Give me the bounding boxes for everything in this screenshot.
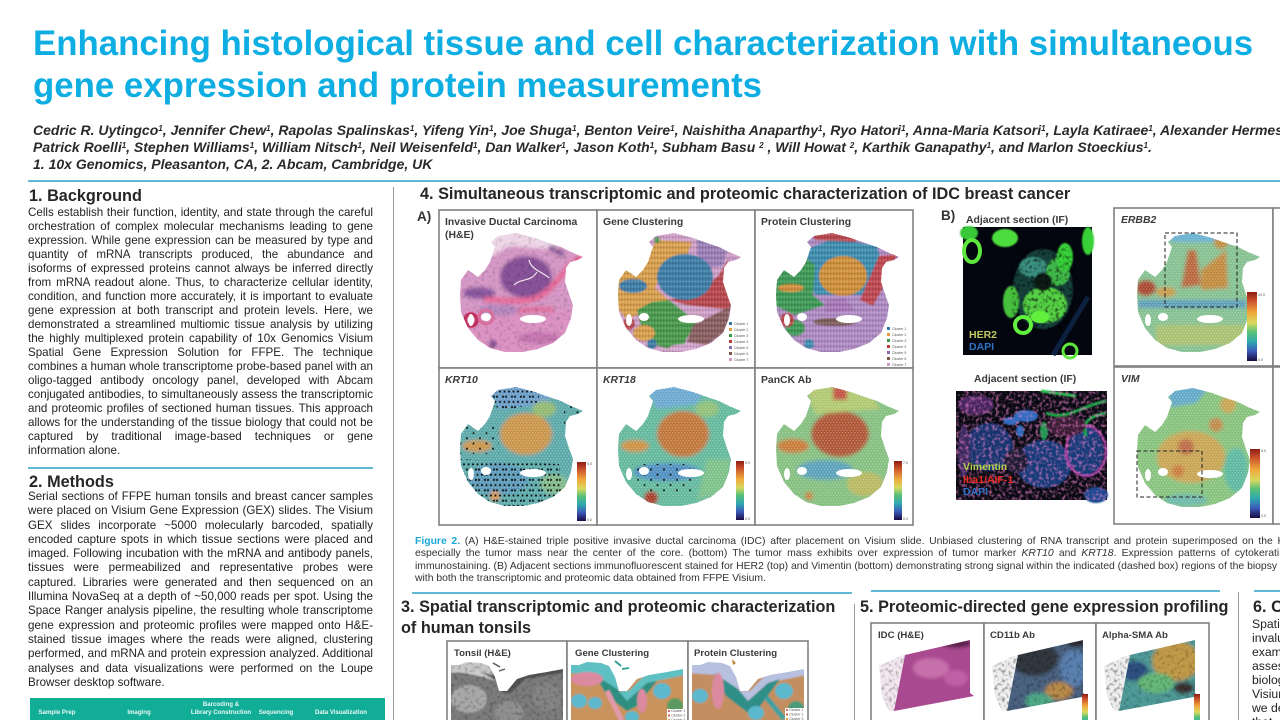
text: background: combines a human whole transcriptome probe-based panel with an (28, 360, 373, 373)
labels: HER2 channels (969, 329, 997, 353)
label: adjacent section vimentin: Adjacent section (IF) (974, 374, 1076, 385)
panel: KRT10: 0.0 (587, 518, 592, 522)
text: background: allows for the understanding of the tissue biology that could not be (28, 416, 373, 429)
panel: gene clustering (597, 210, 755, 368)
panel: VIM: 9.0 (1261, 449, 1266, 453)
text: methods: gene expression and proteomic profiles were mapped onto H&E- (28, 619, 373, 632)
legend: tonsil gene clusters (667, 709, 685, 720)
panel: KRT18: 0.0 (745, 517, 750, 521)
panel: tonsil protein clustering: Protein Clustering (694, 648, 777, 659)
legend: protein clusters: Cluster 5 (892, 351, 906, 355)
panel: VIM: 0.0 (1261, 514, 1266, 518)
text: background: quantity of mRNA transcripts produced, the abundance and (28, 248, 373, 261)
legend: gene clusters (729, 322, 748, 362)
legend: gene clusters: Cluster 7 (734, 358, 748, 362)
legend: gene clusters: Cluster 5 (734, 346, 748, 350)
text: methods: were placed on Visium Gene Expression (GEX) slides. The Visium (28, 504, 373, 517)
panel: ERBB2 (1114, 208, 1274, 368)
text: background: oligo-tagged antibody oncology panel, developed with Abcam (28, 374, 373, 387)
heading: section 5: 5. Proteomic-directed gene expression profiling (860, 598, 1228, 616)
figure caption: especially the tumor mass near the center of the core. (bottom) The tumor mass exhibits over expression of tumor marker KRT10 and KRT18. Expression patterns of cytokeratin (415, 548, 1280, 559)
labels: vimentin channels: Iba1/AIF-1 (963, 474, 1013, 486)
heading: section 3: of human tonsils (401, 619, 531, 637)
labels: vimentin channels: Vimentin (963, 461, 1007, 473)
text: methods (28, 490, 373, 689)
authors and affiliations: 1. 10x Genomics, Pleasanton, CA, 2. Abcam, Cambridge, UK (33, 156, 432, 172)
figure caption (415, 536, 1280, 584)
workflow header band (30, 698, 385, 720)
text: methods: stained tissue images where the reads were aligned, clustering (28, 633, 373, 646)
panel: tonsil H&E (447, 641, 567, 720)
text: methods: analyses and data visualizations were performed on the Loupe (28, 662, 373, 675)
figure caption: with both the transcriptomic and proteomic data obtained from FFPE Visium. (415, 573, 766, 584)
panel: tonsil protein clustering (688, 641, 808, 720)
text: methods: Illumina NovaSeq at a depth of ~50,000 reads per spot. Using the (28, 590, 373, 603)
legend: protein clusters: Cluster 4 (892, 345, 906, 349)
image: vimentin immunofluorescence (956, 391, 1108, 503)
panel: tonsil H&E: Tonsil (H&E) (454, 648, 511, 659)
workflow header band: Imaging (127, 709, 151, 716)
legend: gene clusters: Cluster 1 (734, 322, 748, 326)
text: background: demonstrated a streamlined multiomic tissue analysis by utilizing (28, 318, 373, 331)
panel: PanCK Ab: 7.0 (903, 461, 908, 465)
heading: section 3: 3. Spatial transcriptomic and proteomic characterization (401, 598, 835, 616)
panel label: B: B) (941, 208, 955, 223)
panel: IDC H&E: IDC (H&E) (878, 630, 924, 641)
panel: Alpha-SMA Ab (1096, 623, 1209, 720)
heading: background: 1. Background (29, 187, 142, 205)
text: background: Spatial Gene Expression Solution for FFPE. The technique (28, 346, 373, 359)
panel: VIM: VIM (1121, 374, 1140, 385)
panel: PanCK Ab (755, 364, 913, 525)
legend: gene clusters: Cluster 6 (734, 352, 748, 356)
labels: HER2 channels: DAPI (969, 341, 994, 353)
image: HER2 immunofluorescence (960, 226, 1094, 358)
legend: tonsil protein clusters (785, 708, 805, 720)
legend: protein clusters: Cluster 6 (892, 357, 906, 361)
labels: HER2 channels: HER2 (969, 329, 997, 341)
panel: CD11b Ab: CD11b Ab (990, 630, 1035, 641)
legend: gene clusters: Cluster 4 (734, 340, 748, 344)
heading: section 4: 4. Simultaneous transcriptomic and proteomic characterization of IDC breast cancer (420, 185, 1070, 203)
workflow header band: Data Visualization (315, 709, 367, 716)
legend: tonsil gene clusters: Cluster 1 (671, 709, 685, 713)
text: background: information alone. (28, 444, 120, 457)
text: methods: captured. Libraries were generated and then sequenced on an (28, 576, 373, 589)
panel: ERBB2: 10.0 (1258, 293, 1265, 297)
title: gene expression and protein measurements (33, 66, 762, 105)
panel: PanCK Ab: PanCK Ab (761, 375, 811, 386)
workflow header band: Sample Prep (39, 709, 75, 716)
panel: tonsil gene clustering (567, 641, 688, 720)
panel: PanCK Ab: 0.0 (903, 517, 908, 521)
legend: tonsil gene clusters: Cluster 2 (671, 714, 685, 718)
legend: protein clusters (887, 327, 906, 367)
panel: KRT18 (597, 364, 755, 525)
legend: protein clusters: Cluster 2 (892, 333, 906, 337)
text: methods: imaged. Following incubation with the mRNA and antibody panels, (28, 547, 373, 560)
text: conclusions (1252, 617, 1280, 720)
label: adjacent section HER2: Adjacent section (IF) (966, 215, 1068, 226)
heading: methods: 2. Methods (29, 473, 114, 491)
panel: KRT18: KRT18 (603, 375, 636, 386)
legend: gene clusters: Cluster 2 (734, 328, 748, 332)
text: background: isoforms of expressed proteins cannot always be inferred directly (28, 262, 373, 275)
panel: KRT10: 5.0 (587, 462, 592, 466)
text: background: orchestration of complex molecular mechanisms leading to gene (28, 220, 373, 233)
legend: protein clusters: Cluster 1 (892, 327, 906, 331)
authors and affiliations (33, 122, 1280, 172)
text: methods: tissues were permeabilized and representative probes were (28, 561, 373, 574)
text: methods: Serial sections of FFPE human tonsils and breast cancer samples (28, 490, 373, 503)
text: background: from mRNA readout alone. Thus, to characterize cellular identity, (28, 276, 373, 289)
panel: gene clustering: Gene Clustering (603, 217, 683, 228)
text: background: and proteomic profiles of sectioned human tissues. This approach (28, 402, 373, 415)
dashed box: ERBB2 region (1165, 233, 1237, 307)
legend: tonsil protein clusters: Cluster 2 (789, 712, 803, 716)
authors and affiliations: Patrick Roelli1, Stephen Williams1, William Nitsch1, Neil Weisenfeld1, Dan Walker1, Jason Koth1, Subham Basu 2 , Will Howat 2, Karthik Ganapathy1, and Marlon Stoeckius1. (33, 139, 1152, 155)
title (33, 24, 1253, 105)
title: Enhancing histological tissue and cell characterization with simultaneous (33, 24, 1253, 63)
dashed box: VIM region (1137, 451, 1202, 497)
panel: Alpha-SMA Ab: Alpha-SMA Ab (1102, 630, 1168, 641)
text: background (28, 206, 373, 457)
panel: H&E IDC (439, 210, 597, 368)
workflow header band: Barcoding & (203, 701, 239, 708)
labels: vimentin channels: DAPI (963, 486, 988, 498)
authors and affiliations: Cedric R. Uytingco1, Jennifer Chew1, Rapolas Spalinskas1, Yifeng Yin1, Joe Shuga1, Benton Veire1, Naishitha Anaparthy1, Ryo Hatori1, Anna-Maria Katsori1, Layla Katiraee1, Alexander Hermes1, (33, 122, 1280, 138)
panels: right-hand cropped column (1273, 208, 1280, 524)
text: methods: Browser desktop software. (28, 676, 165, 689)
panel: ERBB2: ERBB2 (1121, 215, 1156, 226)
panel: KRT18: 9.0 (745, 461, 750, 465)
panel: protein clustering (755, 210, 913, 368)
legend: protein clusters: Cluster 7 (892, 363, 906, 367)
figure caption: Figure 2. (A) H&E-stained triple positive invasive ductal carcinoma (IDC) after placement on Visium slide. Unbiased clustering of RNA transcript and protein superimposed on the H (415, 536, 1280, 547)
text: methods: encoded capture spots in which tissue sections were placed and (28, 533, 373, 546)
panel: protein clustering: Protein Clustering (761, 217, 851, 228)
panel: IDC H&E (871, 623, 984, 720)
text: background: conjugated antibodies, to simultaneously assess the transcriptomic (28, 388, 373, 401)
labels: vimentin channels (963, 461, 1013, 498)
legend: gene clusters: Cluster 3 (734, 334, 748, 338)
text: background: expression. While gene expression can be measured by type and (28, 234, 373, 247)
panel: tonsil gene clustering: Gene Clustering (575, 648, 649, 659)
text: methods: GEX slides incorporate ~5000 molecularly barcoded, spatially (28, 519, 373, 532)
panel: CD11b Ab (984, 623, 1096, 720)
heading: section 3 (401, 598, 835, 637)
panel: ERBB2: 0.0 (1258, 358, 1263, 362)
panel: KRT10 (439, 364, 597, 525)
legend: protein clusters: Cluster 3 (892, 339, 906, 343)
text: background: gene expression at both transcript and protein levels. Here, we (28, 304, 373, 317)
workflow header band: Sequencing (259, 709, 293, 716)
text: background: the highly multiplexed protein capability of 10x Genomics Visium (28, 332, 373, 345)
panel: H&E IDC: Invasive Ductal Carcinoma (445, 217, 577, 228)
text: methods: Space Ranger analysis pipeline, the resulting whole transcriptome (28, 604, 373, 617)
panel: KRT10: KRT10 (445, 375, 478, 386)
text: background: Cells establish their function, identity, and state through the careful (28, 206, 373, 219)
text: methods: performed, and mRNA and protein expression analyzed. Additional (28, 647, 373, 660)
text: background: condition, and function more accurately, it is important to evaluate (28, 290, 373, 303)
legend: tonsil protein clusters: Cluster 1 (789, 708, 803, 712)
panel label: A: A) (417, 209, 431, 224)
figure caption: immunostaining. (B) Adjacent sections immunofluorescent stained for HER2 (top) and Vimentin (bottom) demonstrating strong signal within the indicated (dashed box) regions of the biopsy (415, 561, 1277, 572)
panel: H&E IDC: (H&E) (445, 230, 474, 241)
panel: VIM (1114, 365, 1274, 524)
workflow header band: Library Construction (191, 708, 251, 716)
